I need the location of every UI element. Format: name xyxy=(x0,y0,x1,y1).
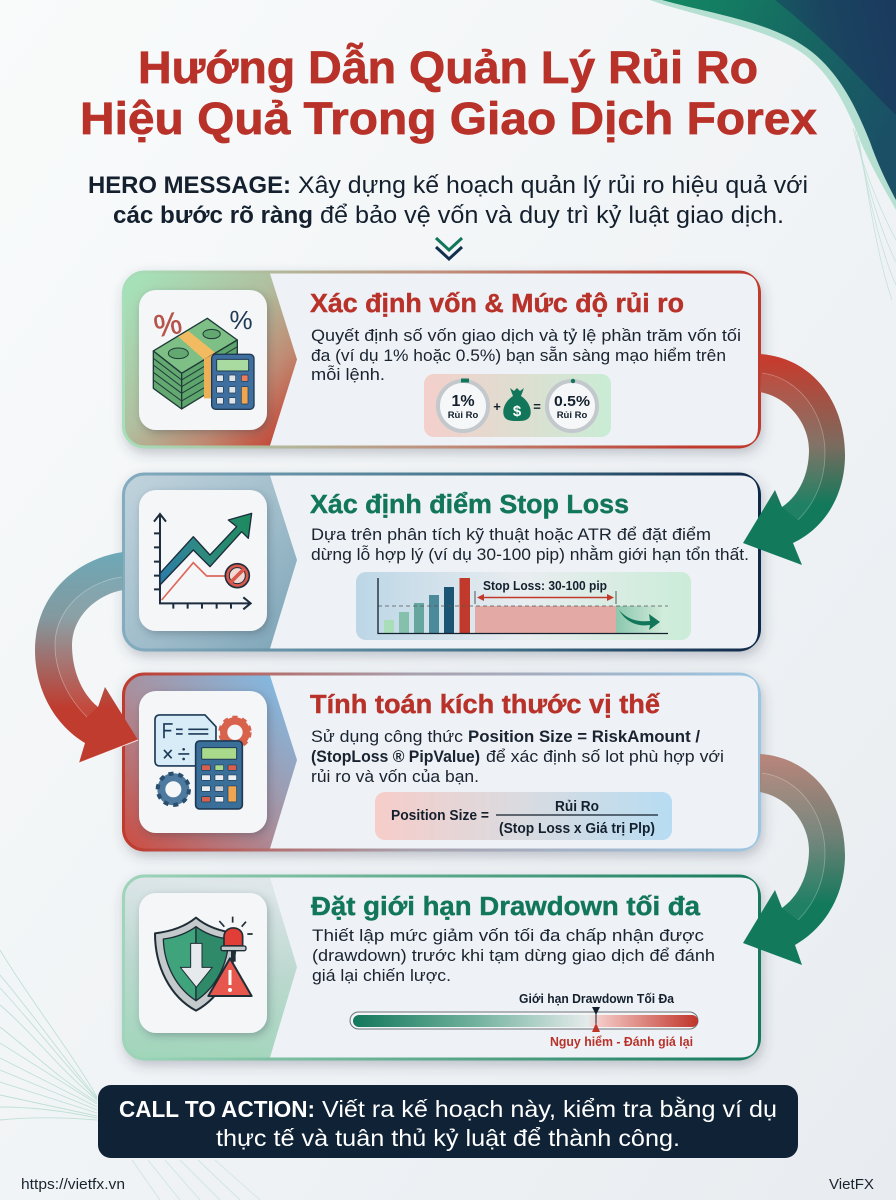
title: Hướng Dẫn Quản Lý Rủi Ro xyxy=(138,42,758,93)
call to action xyxy=(98,1085,798,1158)
body text: rủi ro và vốn của bạn. xyxy=(311,767,479,786)
position size formula: (Stop Loss x Giá trị Plp) xyxy=(499,821,655,837)
risk equation diagram: 0.5% xyxy=(554,393,590,410)
risk equation diagram: = xyxy=(533,399,541,414)
hero message: để bảo vệ vốn và duy trì kỷ luật giao dịch. xyxy=(320,202,784,229)
heading: Xác định vốn & Mức độ rủi ro xyxy=(310,290,684,318)
body text: Thiết lập mức giảm vốn tối đa chấp nhận được xyxy=(312,926,705,945)
icon: double chevron down xyxy=(436,238,462,259)
decorative swoosh: top right xyxy=(650,0,896,300)
hero message: Xây dựng kế hoạch quản lý rủi ro hiệu quả với xyxy=(298,172,808,199)
icon tile: chart with stop sign xyxy=(139,490,267,631)
body text: giá lại chiến lược. xyxy=(312,966,451,985)
position size formula: Position Size = xyxy=(391,808,489,824)
stop loss chart xyxy=(356,572,691,640)
hero message xyxy=(88,172,808,229)
position size formula: Rủi Ro xyxy=(555,799,599,815)
risk equation diagram xyxy=(424,374,611,437)
risk equation diagram: Rủi Ro xyxy=(557,410,587,421)
body text xyxy=(312,926,715,985)
body text: Sử dụng công thức xyxy=(311,727,464,746)
call to action: CALL TO ACTION: xyxy=(119,1096,315,1122)
heading: Tính toán kích thước vị thế xyxy=(310,691,661,719)
risk equation diagram: 1% xyxy=(451,393,475,410)
footer url: https://vietfx.vn xyxy=(21,1177,125,1193)
title xyxy=(80,42,817,144)
risk equation diagram: + xyxy=(493,399,501,414)
icon tile: money and calculator: % xyxy=(229,305,253,335)
panel: step 1 capital and risk xyxy=(124,272,760,447)
body text: để xác định số lot phù hợp với xyxy=(486,747,724,766)
body text: (StopLoss ® PipValue) xyxy=(311,747,480,766)
drawdown gauge: Nguy hiểm - Đánh giá lại xyxy=(550,1034,693,1049)
heading: Xác định điểm Stop Loss xyxy=(310,491,629,519)
hero message: các bước rõ ràng xyxy=(113,202,313,229)
drawdown gauge xyxy=(350,992,698,1049)
body text xyxy=(311,525,749,564)
body text: dừng lỗ hợp lý (ví dụ 30-100 pip) nhằm giới hạn tổn thất. xyxy=(311,545,749,564)
icon tile: shield and alarm xyxy=(139,893,267,1033)
call to action: Viết ra kế hoạch này, kiểm tra bằng ví dụ xyxy=(322,1096,777,1122)
title: Hiệu Quả Trong Giao Dịch Forex xyxy=(80,93,817,144)
icon tile: money and calculator: % xyxy=(151,305,185,344)
risk equation diagram: $ xyxy=(513,403,522,420)
body text: (drawdown) trước khi tạm dừng giao dịch để đánh xyxy=(312,946,715,965)
body text: Position Size = RiskAmount / xyxy=(468,727,700,746)
arrow: step 2 to step 3 xyxy=(35,552,138,763)
call to action: thực tế và tuân thủ kỷ luật để thành công. xyxy=(216,1125,680,1151)
arrow: step 1 to step 2 xyxy=(743,354,845,565)
body text: Quyết định số vốn giao dịch và tỷ lệ phần trăm vốn tối xyxy=(311,326,741,345)
decorative fan lines: bottom left xyxy=(0,950,260,1200)
heading: Đặt giới hạn Drawdown tối đa xyxy=(311,893,701,921)
footer brand: VietFX xyxy=(829,1177,874,1193)
body text: Dựa trên phân tích kỹ thuật hoặc ATR để đặt điểm xyxy=(311,525,711,544)
panel: step 3 position size xyxy=(124,674,760,850)
icon tile: money and calculator xyxy=(139,290,267,430)
panel: step 2 stop loss xyxy=(124,474,760,650)
risk equation diagram: Rủi Ro xyxy=(448,410,478,421)
panel: step 4 drawdown limit xyxy=(124,876,760,1059)
arrow: step 3 to step 4 xyxy=(743,754,845,965)
icon tile: formula, calculator and gears xyxy=(139,691,267,833)
body text xyxy=(311,727,724,786)
body text xyxy=(311,326,741,384)
hero message: HERO MESSAGE: xyxy=(88,172,291,199)
stop loss chart: Stop Loss: 30-100 pip xyxy=(483,579,607,593)
position size formula xyxy=(375,792,672,840)
body text: đa (ví dụ 1% hoặc 0.5%) bạn sẵn sàng mạo hiểm trên xyxy=(311,346,726,365)
drawdown gauge: Giới hạn Drawdown Tối Đa xyxy=(519,992,675,1006)
body text: mỗi lệnh. xyxy=(311,365,385,384)
